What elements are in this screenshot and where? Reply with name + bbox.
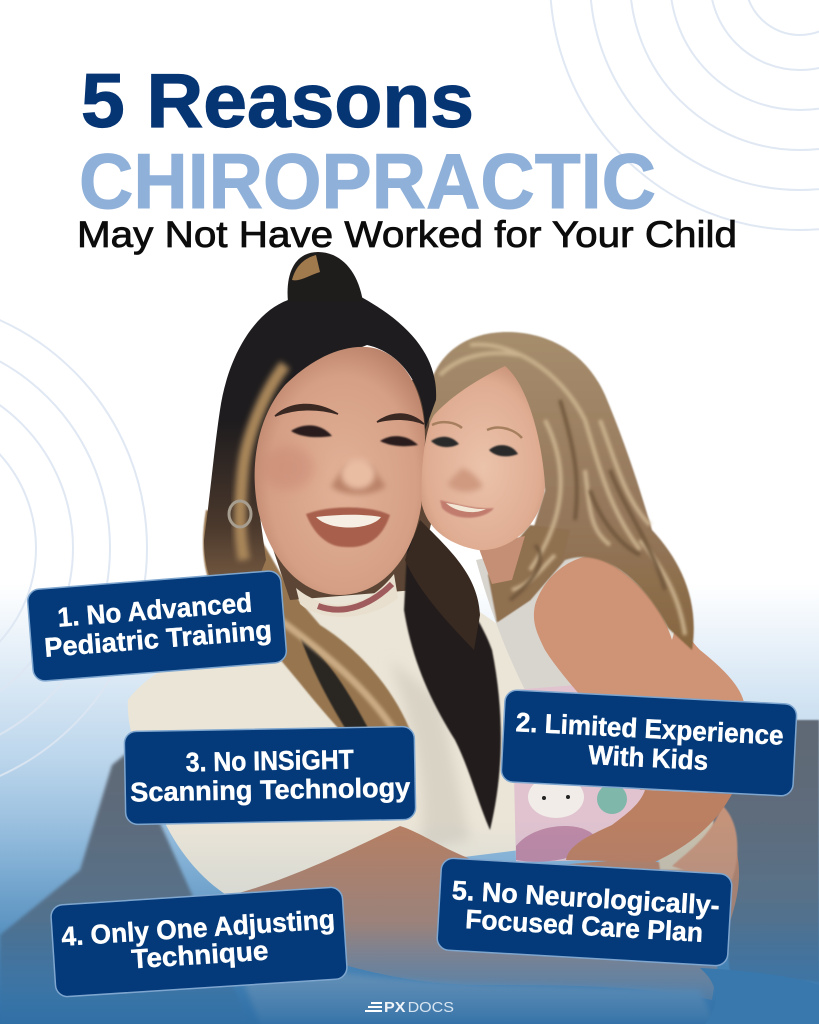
child's hair highlights bbox=[440, 344, 685, 635]
child's shirt bbox=[476, 528, 680, 690]
woman's hair, side bbox=[204, 288, 436, 612]
woman's earring bbox=[229, 501, 251, 527]
card 5: No Neurologically-Focused Care Plan: 5. No Neurologically- bbox=[451, 875, 720, 921]
card 5: No Neurologically-Focused Care Plan: Focused Care Plan bbox=[465, 904, 704, 948]
logo wordmark: PXDOCS bbox=[384, 999, 454, 1016]
child's neck bbox=[478, 536, 525, 584]
card 5: No Neurologically-Focused Care Plan bbox=[437, 858, 732, 966]
blond hair streaks bbox=[270, 612, 400, 740]
child's face bbox=[422, 366, 545, 550]
card 4: Only One Adjusting Technique: Technique bbox=[131, 936, 269, 974]
child's hair curls under chin bbox=[488, 525, 570, 622]
child's brows bbox=[432, 422, 522, 438]
nose highlight bbox=[341, 459, 375, 489]
woman's mouth bbox=[306, 507, 390, 547]
child's hair darker tones bbox=[510, 400, 665, 600]
lower clothing bbox=[235, 960, 715, 1024]
card 3: No INSiGHT Scanning Technology bbox=[124, 726, 416, 825]
woman's left hair, long bbox=[203, 510, 412, 735]
curly brown hair between faces bbox=[405, 520, 480, 650]
card 1: No Advanced Pediatric Training: Pediatric Training bbox=[43, 615, 273, 663]
card 2: Limited Experience With Kids: 2. Limited Experience bbox=[515, 707, 784, 751]
heading line: 5 Reasons: 5 Reasons bbox=[81, 59, 474, 144]
hello kitty print bbox=[516, 776, 627, 862]
title bbox=[77, 59, 737, 255]
shirt shading bbox=[390, 660, 470, 850]
eyebrows bbox=[275, 404, 424, 424]
child's shirt print bbox=[512, 680, 648, 862]
bottom colour wash over the photo bbox=[0, 820, 819, 1024]
couch: left bbox=[0, 752, 250, 1024]
card 4: Only One Adjusting Technique bbox=[50, 887, 348, 997]
child's mouth bbox=[440, 500, 494, 518]
heading line: subtitle: May Not Have Worked for Your Child bbox=[77, 214, 737, 255]
card 1: No Advanced Pediatric Training: 1. No Advanced bbox=[56, 588, 253, 633]
bottom right blue seat bbox=[700, 968, 819, 1024]
bun highlight bbox=[292, 255, 320, 280]
woman's hair highlight bbox=[240, 365, 285, 560]
woman's hair bun bbox=[288, 252, 363, 302]
dark hair streak bbox=[300, 636, 368, 728]
woman's hand bbox=[672, 805, 737, 880]
woman's shirt bbox=[128, 570, 560, 896]
woman's hair, dark right strands bbox=[404, 530, 501, 830]
child's forearm bbox=[566, 790, 732, 862]
child's hair bbox=[425, 332, 694, 650]
couch: right bbox=[700, 720, 819, 982]
woman's teeth bbox=[316, 515, 381, 528]
heading line: CHIROPRACTIC: CHIROPRACTIC bbox=[79, 137, 656, 225]
card 2: Limited Experience With Kids: With Kids bbox=[588, 740, 709, 776]
decorative arcs: top right bbox=[550, 0, 819, 230]
woman's collar bbox=[296, 574, 398, 617]
woman's arm bbox=[228, 826, 739, 1000]
cheek blush bbox=[262, 446, 314, 490]
card 2: Limited Experience With Kids bbox=[501, 690, 797, 796]
child's upper arm bbox=[534, 555, 745, 790]
woman's eyes bbox=[291, 425, 418, 446]
woman's necklace bbox=[318, 584, 392, 610]
child's shirt strap bbox=[578, 528, 680, 640]
hair backing behind the woman's face bbox=[250, 380, 432, 600]
logo: PX DOCS bbox=[365, 999, 454, 1016]
nose shadow bbox=[331, 465, 386, 494]
decorative arcs: left bbox=[0, 298, 147, 798]
child's eyes bbox=[431, 437, 518, 456]
card 1: No Advanced Pediatric Training bbox=[27, 570, 287, 682]
card 3: No INSiGHT Scanning Technology: Scanning Technology bbox=[130, 773, 410, 807]
icon: logo bars bbox=[365, 1002, 382, 1012]
card 4: Only One Adjusting Technique: 4. Only One Adjusting bbox=[60, 904, 336, 952]
child's teeth bbox=[446, 503, 486, 512]
child's nose bbox=[447, 468, 483, 492]
photo: woman and child bbox=[0, 252, 819, 1024]
woman's sleeve under the hand bbox=[653, 812, 716, 870]
woman's face bbox=[255, 347, 425, 595]
card 3: No INSiGHT Scanning Technology: 3. No INSiGHT bbox=[185, 745, 354, 777]
